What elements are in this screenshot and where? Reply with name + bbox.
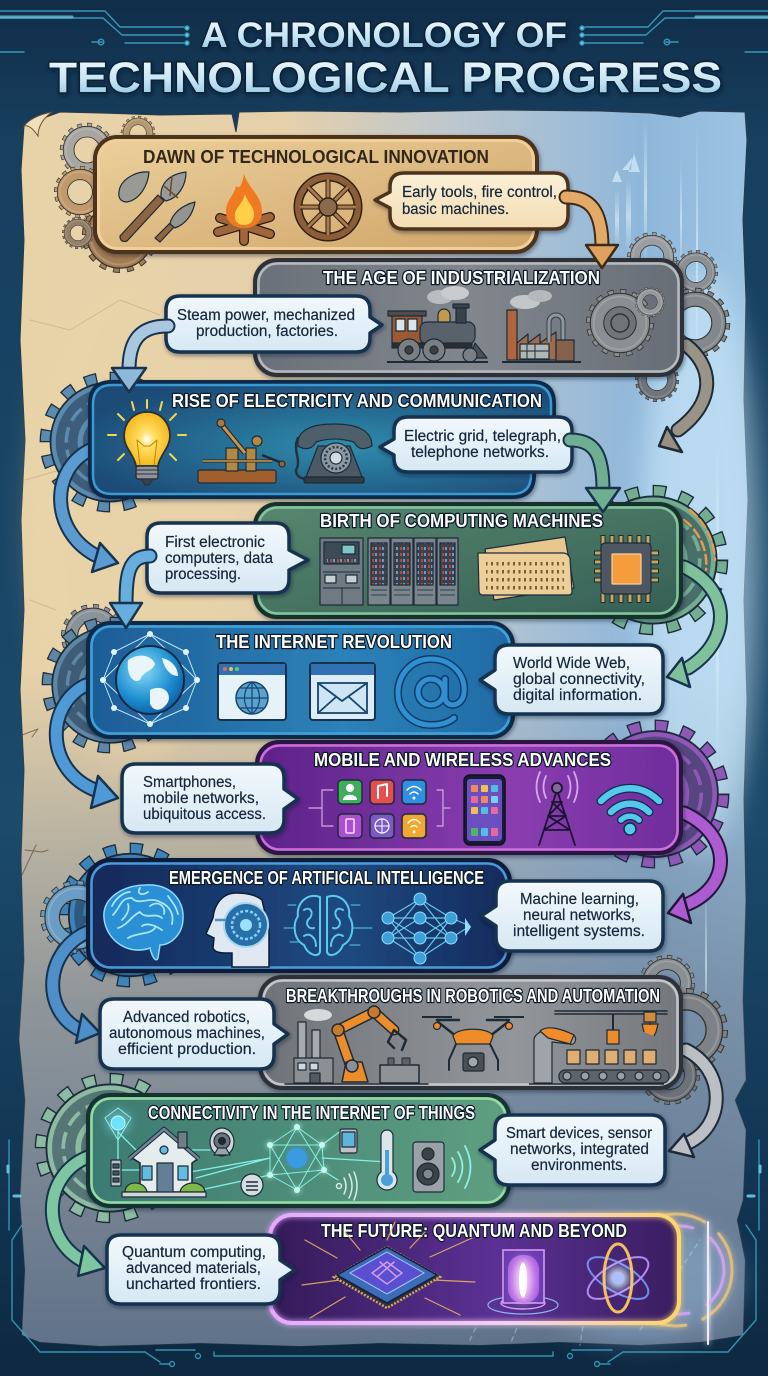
glowing portal ring	[620, 1214, 732, 1344]
heading: RISE OF ELECTRICITY AND COMMUNICATION	[172, 391, 542, 411]
icon: light bulb	[108, 400, 186, 485]
heading: MOBILE AND WIRELESS ADVANCES	[314, 750, 611, 770]
icon: tablet	[340, 1129, 357, 1153]
title	[49, 16, 722, 102]
icon: microchip	[594, 535, 659, 603]
icon: mail window	[310, 663, 375, 720]
arrow: computing to internet	[110, 556, 150, 628]
callout: Advanced robotics,	[123, 1009, 250, 1026]
callout: efficient production.	[118, 1041, 256, 1058]
panel: dawn of technological innovation	[95, 137, 568, 252]
icon: neural network	[382, 893, 471, 964]
icon: factory	[502, 290, 581, 362]
panel: rise of electricity and communication	[90, 382, 572, 497]
icon: quantum chip	[302, 1222, 475, 1318]
arrow: robotics to IoT side	[669, 1050, 716, 1157]
callout	[480, 645, 663, 714]
background gears	[41, 118, 726, 1217]
icon: rotary telephone	[296, 424, 372, 483]
icon: factory building	[294, 1009, 333, 1083]
icon: webcam	[210, 1128, 234, 1156]
icon: smartphone	[464, 775, 505, 845]
icon: network hub	[267, 1124, 327, 1193]
panel: the internet revolution	[88, 623, 663, 737]
icon: wireless waves	[336, 1172, 357, 1200]
callout: environments.	[531, 1157, 627, 1174]
panel: mobile and wireless advances	[122, 742, 681, 853]
callout: basic machines.	[402, 201, 509, 218]
callout	[480, 1115, 665, 1185]
icon: circuit brain	[284, 896, 372, 955]
callout: autonomous machines,	[109, 1025, 265, 1042]
callout: telephone networks.	[411, 444, 549, 461]
callout: networks, integrated	[510, 1141, 649, 1158]
icon: steam locomotive	[387, 286, 488, 362]
heading: THE FUTURE: QUANTUM AND BEYOND	[321, 1221, 627, 1241]
arrow: AI to robotics side	[53, 932, 100, 1043]
arrow: computing to internet side	[667, 567, 721, 687]
callout	[107, 1235, 295, 1304]
arrow: mobile to AI side	[668, 813, 721, 923]
callout: computers, data	[165, 550, 273, 567]
callout: advanced materials,	[126, 1260, 261, 1277]
heading: THE INTERNET REVOLUTION	[216, 632, 452, 652]
panel: breakthroughs in robotics and automation	[100, 977, 681, 1088]
icon: mainframe computer	[320, 538, 363, 605]
title: TECHNOLOGICAL PROGRESS	[49, 54, 722, 102]
icon: app grid	[309, 780, 450, 838]
icon: smart speaker	[413, 1142, 444, 1192]
icon: thermometer	[377, 1130, 397, 1190]
heading: BREAKTHROUGHS IN ROBOTICS AND AUTOMATION	[286, 986, 660, 1006]
callout: processing.	[165, 566, 241, 583]
callout: Smartphones,	[143, 774, 236, 791]
icon: wheel	[298, 177, 358, 237]
icon: wifi symbol	[601, 788, 659, 835]
icon: quantum portal	[488, 1250, 558, 1314]
arrow: IoT to future side	[52, 1157, 105, 1276]
panel: emergence of artificial intelligence	[88, 860, 663, 971]
icon: fire	[218, 174, 270, 241]
callout: intelligent systems.	[513, 923, 645, 940]
icon: conveyor line	[529, 1011, 669, 1084]
icon: blue brain	[104, 885, 183, 960]
icon: stone tools	[119, 172, 195, 242]
digital streaks on the right side	[470, 120, 719, 1345]
icon: sound waves	[452, 1146, 470, 1188]
callout	[147, 523, 308, 593]
network links	[118, 1127, 388, 1190]
callout: Machine learning,	[520, 891, 639, 908]
panel: connectivity in the internet of things	[88, 1095, 665, 1206]
icon: telegraph	[198, 419, 285, 483]
arrow: electricity to computing side	[61, 450, 118, 572]
heading: DAWN OF TECHNOLOGICAL INNOVATION	[143, 147, 489, 167]
callout: global connectivity,	[513, 671, 645, 688]
icon: server racks	[368, 538, 458, 605]
callout: production, factories.	[196, 323, 338, 340]
callout: Steam power, mechanized	[177, 307, 355, 324]
icon: at sign	[398, 659, 464, 725]
callout: mobile networks,	[143, 790, 259, 807]
callout: Electric grid, telegraph,	[404, 428, 561, 445]
heading: CONNECTIVITY IN THE INTERNET OF THINGS	[148, 1103, 475, 1123]
icon: robot head	[206, 893, 269, 967]
icon: punched cards	[478, 537, 574, 600]
callout	[380, 417, 572, 472]
icon: drone	[422, 1017, 524, 1071]
callout	[375, 173, 568, 229]
arrow: internet to mobile side	[56, 685, 118, 808]
icon: browser window	[218, 663, 286, 720]
panel: the future quantum and beyond	[107, 1215, 679, 1323]
callout: Smart devices, sensor	[506, 1125, 652, 1142]
callout: World Wide Web,	[513, 655, 630, 672]
title: A CHRONOLOGY OF	[201, 16, 567, 55]
heading: THE AGE OF INDUSTRIALIZATION	[323, 268, 600, 288]
callout: uncharted frontiers.	[126, 1276, 261, 1293]
arrow: electricity to computing	[570, 440, 620, 512]
callout: First electronic	[165, 534, 265, 551]
icon: gears	[590, 289, 663, 353]
heading: EMERGENCE OF ARTIFICIAL INTELLIGENCE	[169, 868, 484, 888]
panel: the age of industrialization	[166, 260, 682, 375]
panel: birth of computing machines	[147, 504, 681, 617]
callout	[481, 881, 663, 951]
arrow: dawn to industrialization	[566, 197, 618, 268]
callout	[122, 764, 298, 833]
callout: ubiquitous access.	[143, 806, 266, 823]
callout	[100, 999, 288, 1069]
icon: robot arm	[285, 1006, 428, 1084]
icon: globe with network	[100, 631, 200, 727]
icon: cell tower	[536, 772, 578, 845]
callout	[166, 296, 382, 352]
circuit decoration: bottom frame	[8, 1140, 760, 1366]
icon: smart switch	[111, 1160, 121, 1186]
arrow: industrialization to electricity side	[659, 345, 707, 452]
circuit decoration: top	[0, 11, 768, 52]
callout: Quantum computing,	[122, 1244, 266, 1261]
callout: Early tools, fire control,	[402, 184, 557, 201]
icon: atom	[582, 1244, 654, 1312]
heading: BIRTH OF COMPUTING MACHINES	[320, 511, 603, 531]
callout: digital information.	[513, 687, 642, 704]
arrow: industrialization to electricity	[112, 326, 168, 392]
icon: smart house	[122, 1129, 206, 1197]
callout: neural networks,	[523, 907, 635, 924]
icon: smart bulb	[105, 1108, 131, 1140]
icon: round sensor	[241, 1174, 263, 1196]
